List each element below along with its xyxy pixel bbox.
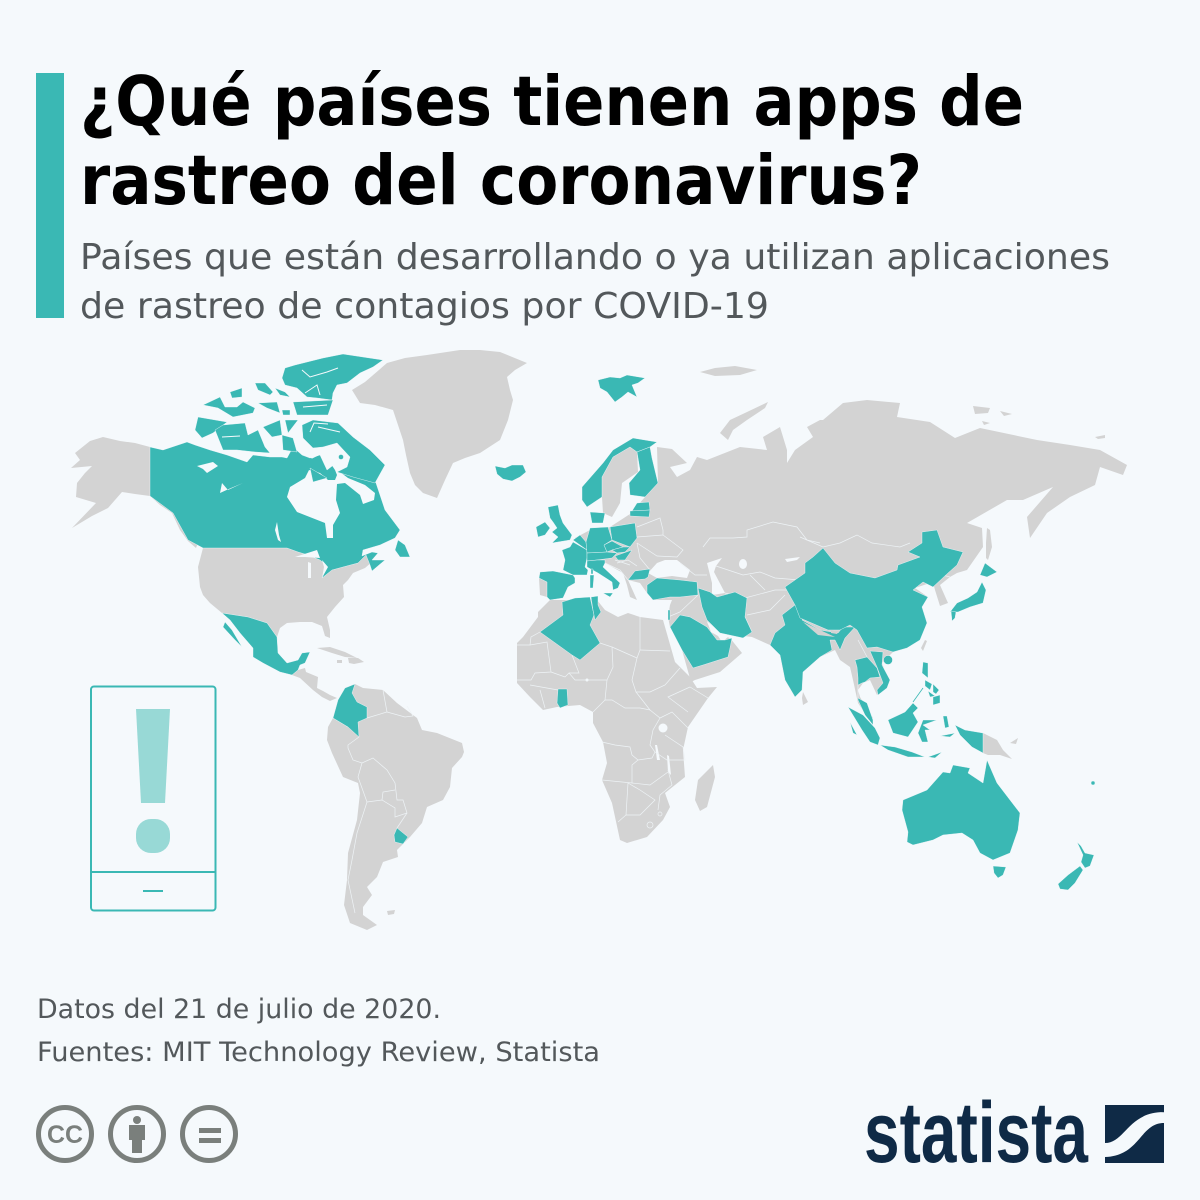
land: New Zealand bbox=[1058, 842, 1094, 890]
land: Ghana bbox=[557, 689, 568, 708]
Arctic fjords bbox=[222, 368, 340, 458]
land: Eurasia bbox=[575, 400, 1127, 718]
land: United States bbox=[198, 548, 372, 638]
land: Nepal and Bhutan bbox=[803, 622, 838, 637]
land: Alaska bbox=[71, 437, 199, 548]
Canadian lakes bbox=[197, 462, 328, 578]
logo: statista: statista bbox=[864, 1085, 1089, 1181]
land: Italy bbox=[587, 560, 620, 597]
land: Central Europe bbox=[586, 523, 637, 561]
subtitle: de rastreo de contagios por COVID-19 bbox=[80, 286, 769, 327]
land: Sri Lanka bbox=[802, 692, 808, 705]
icon: no derivatives bbox=[182, 1108, 236, 1160]
title bbox=[80, 62, 1024, 221]
land: Sweden bbox=[602, 447, 638, 517]
land: Svalbard bbox=[598, 375, 645, 402]
land: Sakhalin bbox=[986, 528, 992, 560]
land: Southeast Asia mainland bbox=[855, 651, 890, 725]
land: Iceland bbox=[495, 465, 526, 481]
icon: attribution bbox=[110, 1108, 164, 1160]
land: Indonesia and Malaysia bbox=[848, 703, 983, 758]
source note: Fuentes: MIT Technology Review, Statista bbox=[37, 1037, 600, 1068]
land: Taiwan bbox=[921, 640, 927, 651]
land: China bbox=[785, 530, 963, 652]
source note bbox=[37, 994, 600, 1068]
land: Central America bbox=[292, 668, 337, 701]
land: Turkey bbox=[647, 578, 698, 600]
land: Colombia bbox=[333, 684, 367, 737]
land: Bulgaria bbox=[628, 569, 650, 580]
title: rastreo del coronavirus? bbox=[80, 141, 922, 221]
land: Tasmania bbox=[993, 866, 1006, 878]
land: Norway bbox=[582, 438, 657, 507]
land: Iran bbox=[698, 588, 752, 638]
source note: Datos del 21 de julio de 2020. bbox=[37, 994, 441, 1025]
land: Portugal bbox=[539, 578, 547, 597]
title: ¿Qué países tienen apps de bbox=[80, 62, 1024, 142]
land: France, Belgium and Spain bbox=[539, 535, 588, 600]
land: Hainan bbox=[884, 656, 892, 664]
Hudson Bay bbox=[287, 443, 375, 538]
land: South America bbox=[327, 684, 464, 930]
land: Israel bbox=[668, 610, 670, 620]
land: Arctic islands of Russia bbox=[700, 366, 1105, 440]
land: Uruguay bbox=[394, 828, 408, 844]
land: Greenland bbox=[352, 350, 527, 498]
land: Finland bbox=[629, 447, 658, 497]
land: Madagascar bbox=[695, 765, 715, 811]
icon: phone with exclamation mark bbox=[91, 686, 216, 910]
land: Australia bbox=[902, 760, 1020, 860]
land: Canada bbox=[150, 354, 410, 578]
subtitle bbox=[80, 237, 1110, 327]
subtitle: Países que están desarrollando o ya utilizan aplicaciones bbox=[80, 237, 1110, 278]
world map bbox=[71, 350, 1127, 930]
land: Algeria and Tunisia bbox=[540, 596, 601, 660]
land: Saudi Arabia and the Gulf bbox=[670, 615, 732, 668]
land: Falkland Islands bbox=[387, 910, 395, 915]
land: Philippines bbox=[913, 662, 940, 705]
land: India bbox=[770, 605, 855, 697]
inland seas bbox=[586, 557, 800, 775]
land: United Kingdom and Ireland bbox=[536, 505, 572, 543]
country borders bbox=[333, 518, 950, 913]
icon: creative commons bbox=[38, 1108, 92, 1160]
icon: creative commons: CC bbox=[47, 1121, 83, 1149]
land: Mexico bbox=[222, 613, 310, 675]
land: Baltic states bbox=[630, 502, 650, 517]
land: Africa bbox=[517, 600, 717, 843]
land: Fiji bbox=[1091, 781, 1095, 785]
land: Denmark bbox=[590, 512, 605, 523]
header accent bar bbox=[36, 73, 64, 318]
land: Papua New Guinea bbox=[983, 733, 1018, 759]
land: Japan bbox=[950, 563, 997, 621]
Arctic islands bbox=[195, 354, 410, 557]
land: Caribbean islands bbox=[317, 647, 364, 664]
